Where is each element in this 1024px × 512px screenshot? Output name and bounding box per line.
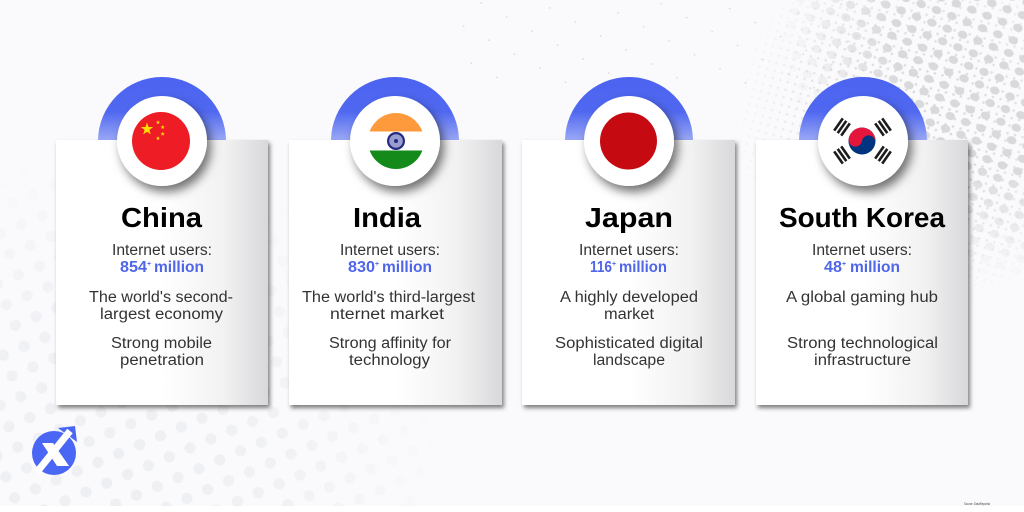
fact: India technology: Strong affinity for bbox=[329, 335, 451, 352]
fact: China economy: The world's second- bbox=[89, 289, 233, 306]
users: India: million bbox=[382, 259, 432, 276]
users: India bbox=[340, 242, 440, 276]
fact: South Korea gaming: A global gaming hub bbox=[786, 289, 938, 306]
users: South Korea: million bbox=[850, 259, 900, 276]
heading: Japan: Japan bbox=[585, 202, 673, 233]
flag badge: South Korea bbox=[818, 96, 908, 186]
arc: Japan bbox=[565, 77, 693, 140]
fact: China mobile bbox=[111, 335, 212, 369]
logo bbox=[32, 426, 77, 475]
users: South Korea: + bbox=[842, 261, 846, 268]
heading: India: India bbox=[353, 202, 421, 233]
panel: China bbox=[56, 140, 268, 405]
heading: South Korea: South Korea bbox=[779, 202, 945, 233]
card: Japan bbox=[522, 77, 735, 405]
fact: Japan digital: Sophisticated digital bbox=[555, 335, 703, 352]
fact: South Korea infrastructure: infrastructure bbox=[814, 352, 911, 369]
card: India bbox=[289, 77, 502, 405]
users: Japan bbox=[579, 242, 679, 276]
fact: Japan digital bbox=[555, 335, 703, 369]
users: China: 854 bbox=[120, 259, 147, 276]
panel: India bbox=[289, 140, 502, 405]
panel: Japan bbox=[522, 140, 735, 405]
source note: Source: DataReportal bbox=[964, 502, 990, 506]
users: Japan: 116 bbox=[590, 259, 612, 276]
fact: Japan market: market bbox=[604, 306, 655, 323]
card: South Korea bbox=[756, 77, 968, 405]
arc: India bbox=[331, 77, 459, 140]
fact: China mobile: Strong mobile bbox=[111, 335, 212, 352]
users: Japan: million bbox=[619, 259, 667, 276]
users: South Korea bbox=[812, 242, 912, 276]
users: China: + bbox=[147, 261, 151, 268]
flag badge: India bbox=[350, 96, 440, 186]
fact: India technology: technology bbox=[349, 352, 430, 369]
arc: South Korea bbox=[799, 77, 927, 140]
users: Japan: + bbox=[612, 261, 616, 268]
users: China: million bbox=[154, 259, 204, 276]
fact: India market: nternet market bbox=[330, 306, 445, 323]
fact: South Korea infrastructure bbox=[787, 335, 938, 369]
fact: Japan market bbox=[560, 289, 698, 323]
heading: China: China bbox=[121, 202, 202, 233]
fact: India market bbox=[302, 289, 476, 323]
fact: South Korea infrastructure: Strong technological bbox=[787, 335, 938, 352]
users: India: 830 bbox=[348, 259, 375, 276]
fact: Japan market: A highly developed bbox=[560, 289, 698, 306]
users: India: Internet users: bbox=[340, 242, 440, 259]
fact: India technology bbox=[329, 335, 451, 369]
fact: India market: The world's third-largest bbox=[302, 289, 476, 306]
card: China bbox=[56, 77, 268, 405]
fact: China economy: largest economy bbox=[100, 306, 223, 323]
users: Japan: Internet users: bbox=[579, 242, 679, 259]
fact: Japan digital: landscape bbox=[593, 352, 665, 369]
users: South Korea: Internet users: bbox=[812, 242, 912, 259]
users: China bbox=[112, 242, 212, 276]
users: China: Internet users: bbox=[112, 242, 212, 259]
fact: China mobile: penetration bbox=[120, 352, 204, 369]
users: South Korea: 48 bbox=[824, 259, 842, 276]
users: India: + bbox=[375, 261, 379, 268]
flag badge: China bbox=[117, 96, 207, 186]
panel: South Korea bbox=[756, 140, 968, 405]
flag badge: Japan bbox=[584, 96, 674, 186]
fact: China economy bbox=[89, 289, 233, 323]
arc: China bbox=[98, 77, 226, 140]
